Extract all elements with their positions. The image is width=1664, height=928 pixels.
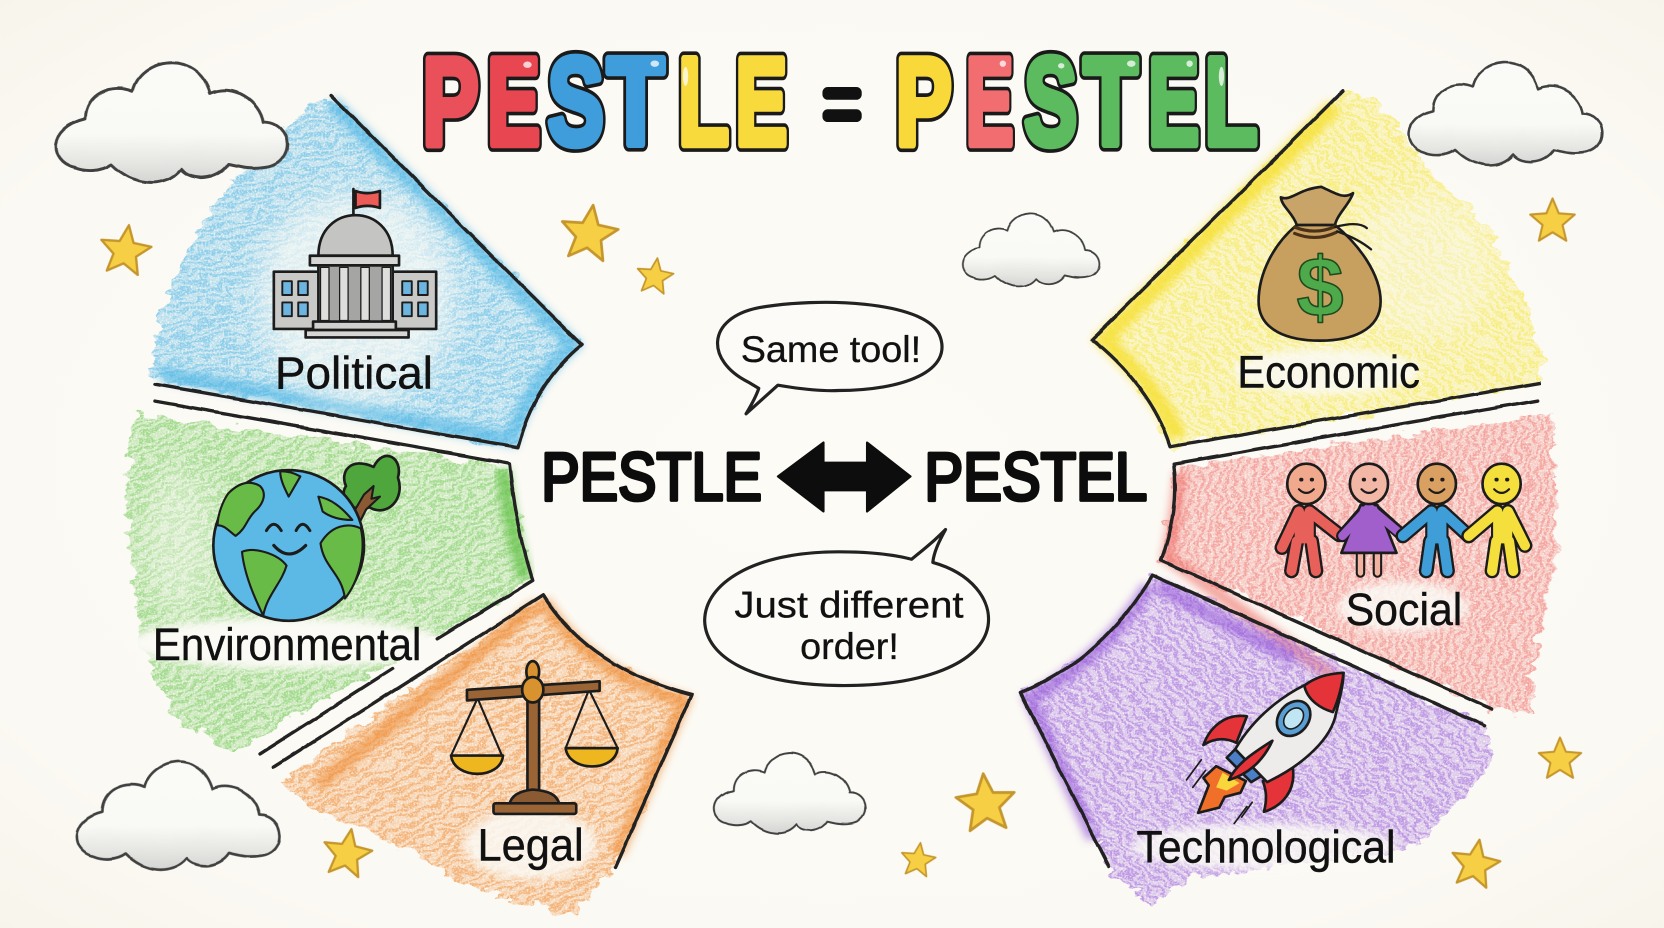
cloud bottom centre [714,753,866,833]
title coloured letters: E [487,33,540,171]
panel: Legal [274,595,692,915]
title coloured letters: T [607,33,664,171]
stars [97,198,1581,889]
label: Economic: Economic [1237,346,1420,397]
title outlines: T [607,33,664,171]
icon: tree [344,456,400,528]
cloud top right [1409,62,1602,165]
title coloured letters: P [422,33,479,171]
label: Social: Social [1346,584,1462,635]
title outlines: S [1024,33,1077,171]
person yellow [1469,464,1525,571]
star 1 [97,222,154,276]
person red [1282,464,1339,571]
star 3 [635,256,675,295]
title outlines: L [1204,33,1258,171]
label: Legal: Legal [478,820,584,871]
panel: Political [149,96,582,448]
title outlines: E [735,33,787,171]
title outlines [422,33,1258,171]
central comparison: PESTLE and PESTEL: PESTEL [924,440,1147,515]
cloud bottom left [77,761,280,870]
callout: Same tool!: Same tool! [741,328,921,370]
label: Technological: Technological [1137,822,1395,873]
title outlines: L [678,33,729,171]
star 4 [1530,198,1575,241]
person blue [1403,464,1469,571]
icon: smiling globe [213,470,364,621]
equals sign [822,87,862,122]
title outlines: P [896,33,952,171]
icon: rocket [1186,673,1343,823]
icon: money bag [1259,187,1381,341]
person purple [1341,464,1403,573]
cloud top left [56,63,287,182]
panel: Environmental [125,401,533,753]
star 6 [1448,836,1503,889]
title coloured letters: E [966,33,1013,171]
central comparison: PESTLE and PESTEL: PESTLE [541,440,762,515]
cloud centre top [962,213,1099,286]
panel: Economic [1092,91,1543,447]
title coloured letters: T [1083,33,1138,171]
callout: Just different order!: Just different [734,584,964,626]
title coloured letters: S [1024,33,1077,171]
faces [1299,480,1509,493]
callout: Just different order! [705,530,989,686]
title coloured letters: L [678,33,729,171]
title coloured letters: E [1148,33,1199,171]
icon: balance scale [451,661,618,814]
title coloured letters: E [735,33,787,171]
title coloured letters: P [896,33,952,171]
central comparison: PESTLE and PESTEL [541,440,1147,515]
callout: Just different order!: order! [800,625,899,667]
title outlines: E [966,33,1013,171]
star 7 [954,771,1017,832]
panel: Social [1161,400,1559,714]
dollar sign: $ [1297,239,1344,334]
star 9 [320,825,375,879]
title coloured letters: L [1204,33,1258,171]
title coloured letters [422,33,1258,171]
label: Environmental: Environmental [153,619,421,670]
title outlines: T [1083,33,1138,171]
icon: capitol building [274,189,436,337]
callout: Same tool! [718,302,942,414]
title outlines: S [548,33,604,171]
star 8 [899,840,937,877]
title outlines: P [422,33,479,171]
star 5 [1539,738,1581,778]
panel: Technological [1021,575,1495,907]
label: Political: Political [275,347,433,398]
title coloured letters: S [548,33,604,171]
title outlines: E [487,33,540,171]
icon: four people holding hands [1282,464,1525,573]
letter highlights [523,60,1224,86]
title outlines: E [1148,33,1199,171]
title: PESTLE = PESTEL [422,33,1258,171]
double arrow [778,443,911,511]
star 2 [558,201,621,262]
